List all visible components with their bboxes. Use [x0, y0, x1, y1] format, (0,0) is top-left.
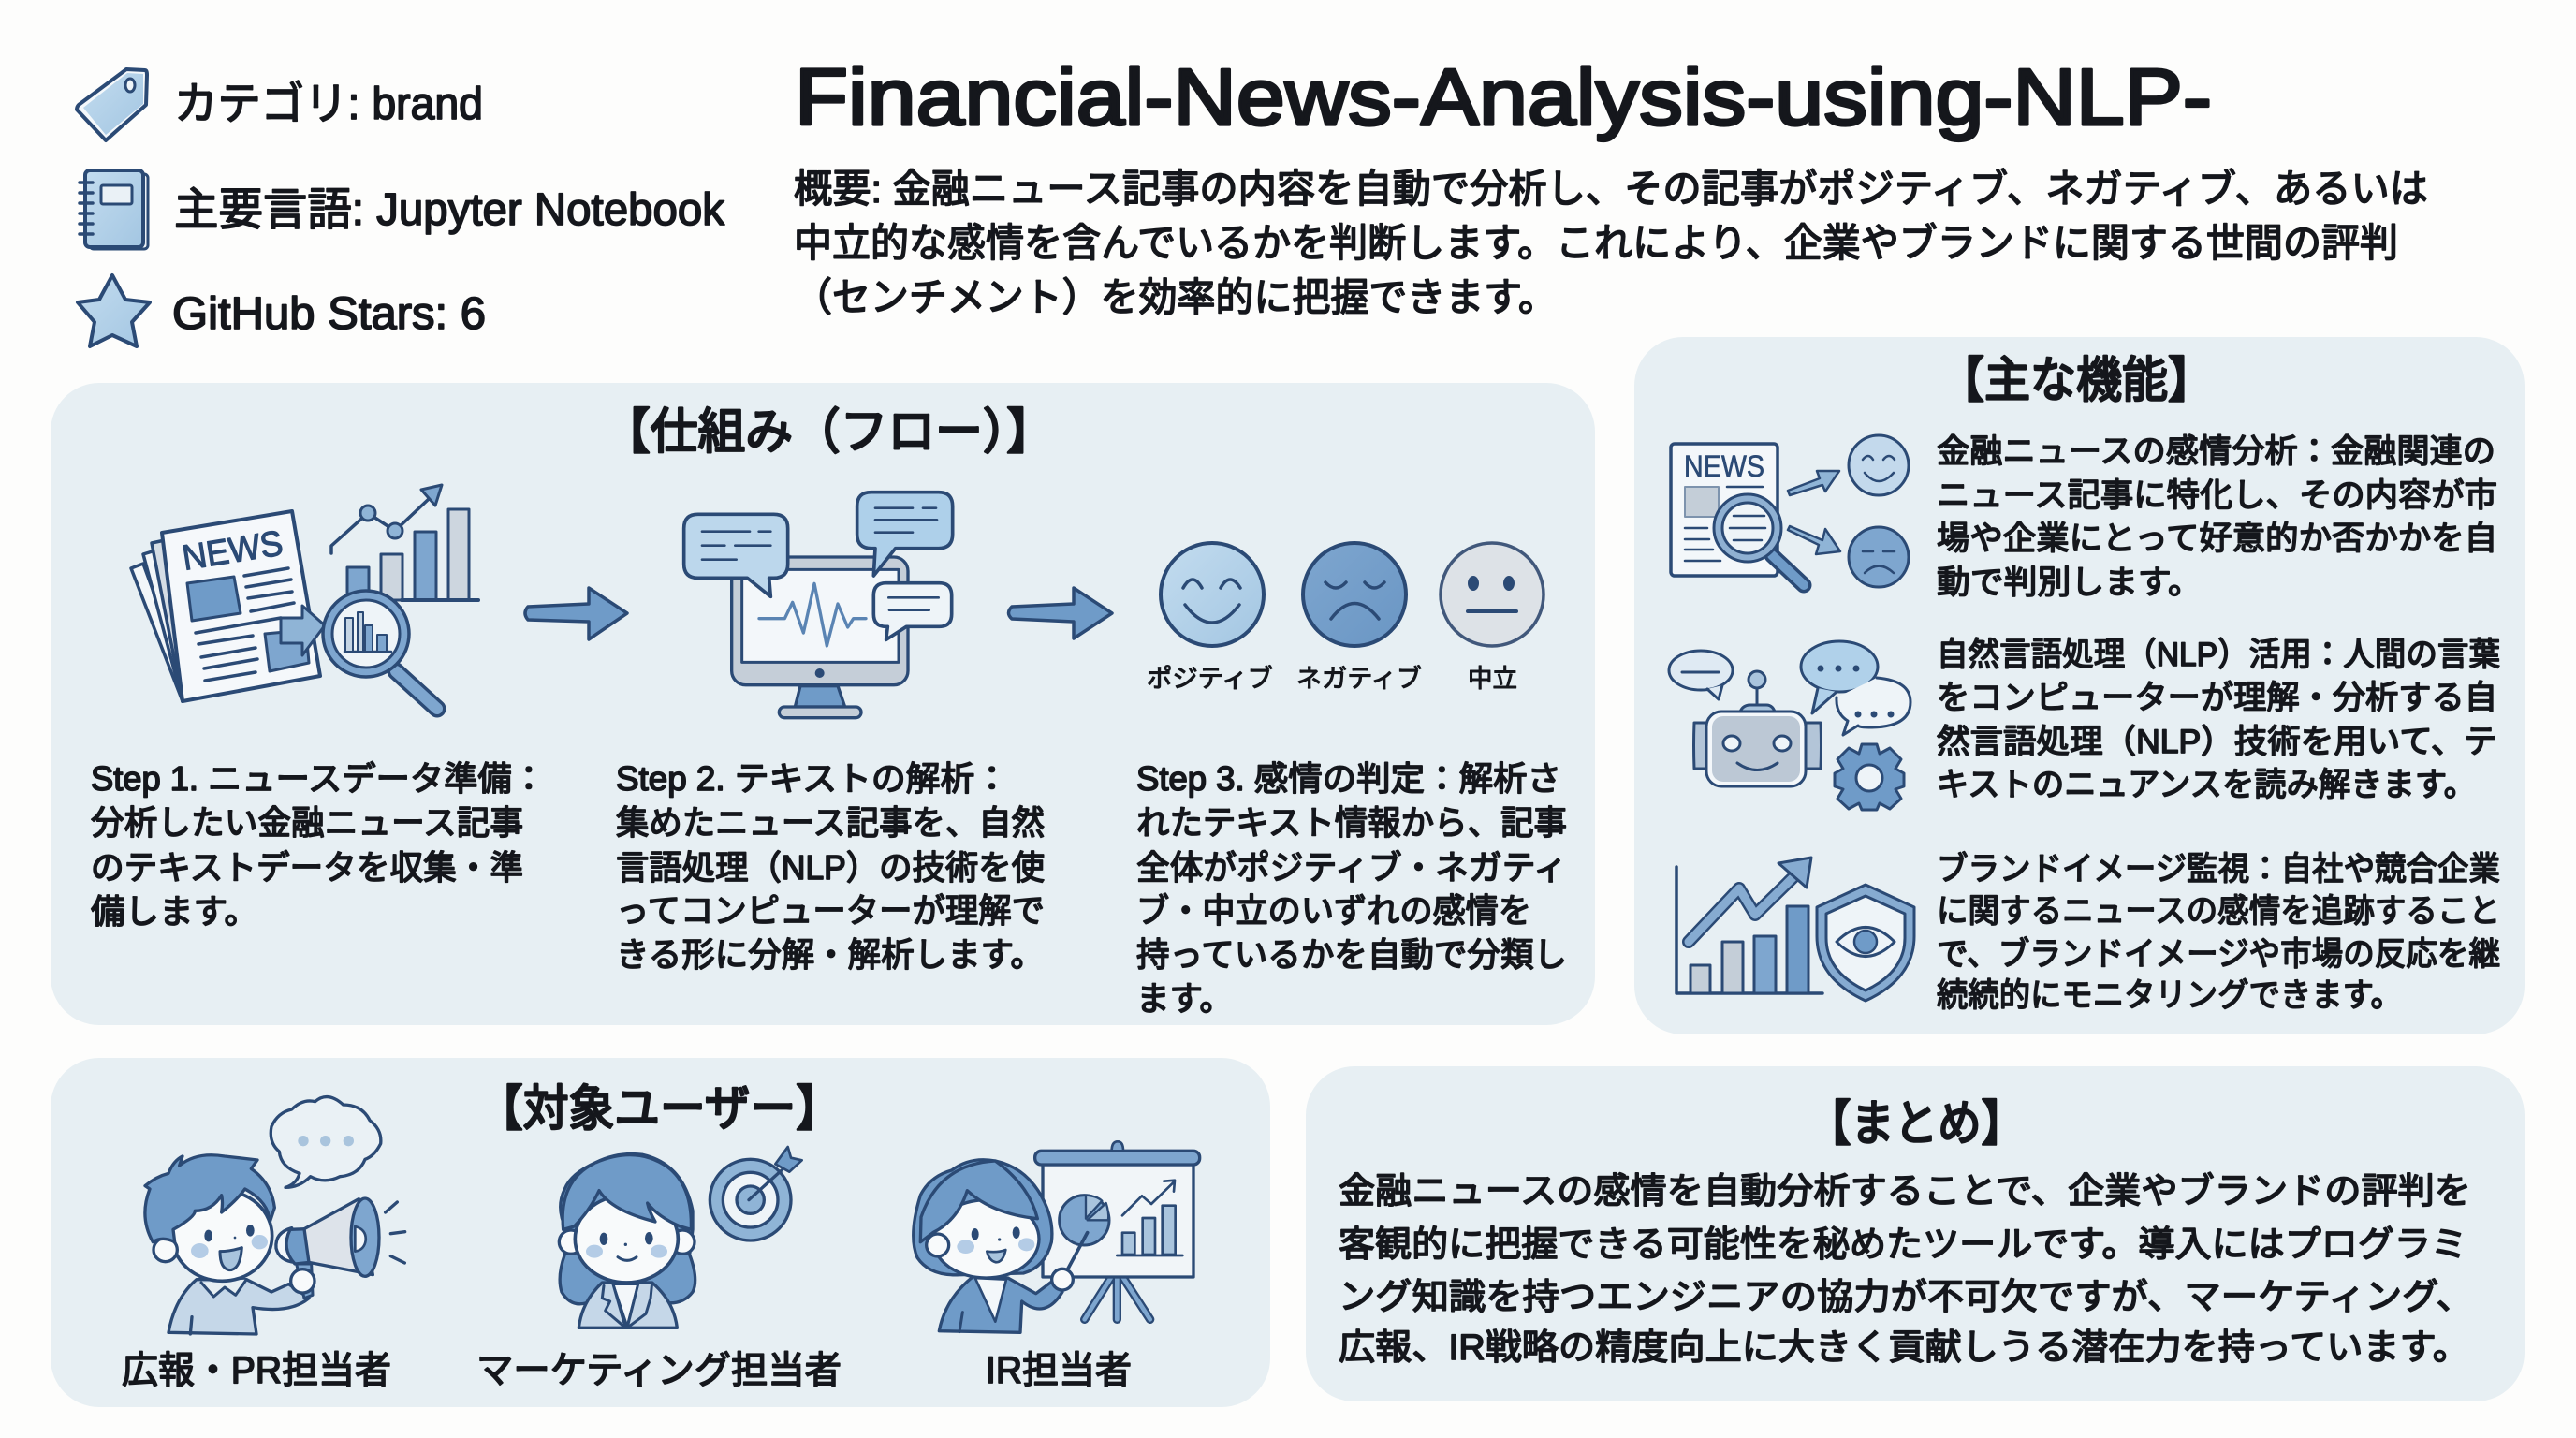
category label: カテゴリ: brand: [174, 80, 483, 129]
step 3 text: Step 3. 感情の判定：解析さ: [1136, 759, 1561, 798]
step 2 text: 言語処理（NLP）の技術を使: [616, 848, 1045, 887]
overview text: （センチメント）を効率的に把握できます。: [794, 275, 1557, 319]
feature 1 text: [1937, 433, 2497, 601]
panel: target users: [51, 1058, 1270, 1407]
feature 3 text: 続続的にモニタリングできます。: [1937, 977, 2402, 1014]
icon: monitor with speech bubbles: [684, 492, 953, 718]
step 1 text: [91, 759, 546, 931]
step 3 text: ます。: [1136, 979, 1233, 1018]
feature 1 text: ニュース記事に特化し、その内容が市: [1937, 477, 2497, 514]
step 3 text: 持っているかを自動で分類し: [1136, 935, 1567, 974]
heading: how it works: 【仕組み（フロー）】: [603, 405, 1054, 460]
panel: summary: [1306, 1066, 2525, 1401]
feature 3 text: で、ブランドイメージや市場の反応を継: [1937, 936, 2500, 973]
feature 3 text: ブランドイメージ監視：自社や競合企業: [1937, 851, 2500, 888]
icon: marketing person with target: [559, 1147, 802, 1328]
icon: newspaper with chart and magnifier: NEWS: [180, 524, 285, 579]
icon: tag: [77, 69, 147, 140]
step 2 text: 集めたニュース記事を、自然: [616, 803, 1045, 842]
step 2 text: ってコンピューターが理解で: [616, 891, 1045, 930]
panel: how it works: [51, 383, 1595, 1025]
icon: notebook: [80, 170, 148, 249]
step 1 text: Step 1. ニュースデータ準備：: [91, 759, 546, 798]
icon: PR person with megaphone: [145, 1097, 405, 1334]
step 2 text: [616, 759, 1045, 974]
icon: newspaper with chart and magnifier: [131, 485, 478, 709]
icon: neutral face: [1441, 543, 1544, 646]
step 1 text: のテキストデータを収集・準: [91, 848, 523, 887]
summary text: ング知識を持つエンジニアの協力が不可欠ですが、マーケティング、: [1339, 1278, 2473, 1317]
step 1 text: 分析したい金融ニュース記事: [91, 803, 523, 842]
icon: news sentiment analysis: NEWS: [1684, 449, 1764, 483]
feature 2 text: [1937, 637, 2500, 803]
summary text: 広報、IR戦略の精度向上に大きく貢献しうる潜在力を持っています。: [1339, 1328, 2469, 1368]
language label: 主要言語: Jupyter Notebook: [174, 185, 725, 235]
arrow: step 1 to step 2: [525, 588, 627, 639]
feature 1 text: 場や企業にとって好意的か否かかを自: [1937, 521, 2497, 557]
panel: main features: [1634, 337, 2525, 1034]
label: positive: ポジティブ: [1147, 665, 1273, 693]
feature 1 text: 動で判別します。: [1937, 565, 2202, 601]
label: PR: 広報・PR担当者: [122, 1350, 391, 1391]
title: Financial-News-Analysis-using-NLP-: [795, 53, 2212, 142]
label: negative: ネガティブ: [1296, 665, 1422, 693]
feature 2 text: キストのニュアンスを読み解きます。: [1937, 767, 2476, 803]
label: neutral: 中立: [1468, 665, 1517, 693]
heading: target users: 【対象ユーザー】: [477, 1082, 842, 1137]
icon: positive face: [1161, 543, 1264, 646]
step 3 text: ブ・中立のいずれの感情を: [1136, 891, 1531, 930]
summary text: 金融ニュースの感情を自動分析することで、企業やブランドの評判を: [1339, 1172, 2471, 1211]
metadata block: [77, 69, 725, 346]
feature 1 text: 金融ニュースの感情分析：金融関連の: [1937, 433, 2496, 470]
icon: news sentiment analysis: [1671, 435, 1909, 587]
step 2 text: Step 2. テキストの解析：: [616, 759, 1009, 798]
step 3 text: [1136, 759, 1567, 1018]
heading: main features: 【主な機能】: [1939, 354, 2214, 408]
feature 3 text: に関するニュースの感情を追跡すること: [1937, 893, 2500, 930]
feature 2 text: 自然言語処理（NLP）活用：人間の言葉: [1937, 637, 2500, 673]
step 1 text: 備します。: [91, 892, 258, 931]
feature 3 text: [1937, 851, 2500, 1014]
sentiment faces: [1161, 543, 1544, 646]
summary text: [1339, 1172, 2473, 1368]
label: marketing: マーケティング担当者: [476, 1350, 842, 1391]
summary text: 客観的に把握できる可能性を秘めたツールです。導入にはプログラミ: [1339, 1225, 2467, 1265]
icon: brand monitoring chart and shield: [1676, 858, 1914, 1001]
label: IR: IR担当者: [986, 1350, 1132, 1391]
step 3 text: 全体がポジティブ・ネガティ: [1136, 848, 1567, 887]
icon: IR person with presentation board: [914, 1141, 1200, 1332]
icon: NLP robot: [1669, 641, 1910, 810]
icon: negative face: [1303, 543, 1406, 646]
stars label: GitHub Stars: 6: [172, 289, 486, 339]
step 3 text: れたテキスト情報から、記事: [1136, 803, 1567, 842]
overview text: 中立的な感情を含んでいるかを判断します。これにより、企業やブランドに関する世間の評判: [794, 221, 2398, 265]
heading: summary: 【まとめ】: [1808, 1097, 2025, 1152]
step 2 text: きる形に分解・解析します。: [616, 935, 1044, 974]
overview text: [794, 167, 2428, 319]
arrow: step 2 to step 3: [1009, 588, 1112, 638]
icon: star: [78, 275, 150, 346]
overview text: 概要: 金融ニュース記事の内容を自動で分析し、その記事がポジティブ、ネガティブ、あるいは: [794, 167, 2428, 211]
feature 2 text: をコンピューターが理解・分析する自: [1937, 680, 2497, 716]
feature 2 text: 然言語処理（NLP）技術を用いて、テ: [1937, 724, 2497, 760]
